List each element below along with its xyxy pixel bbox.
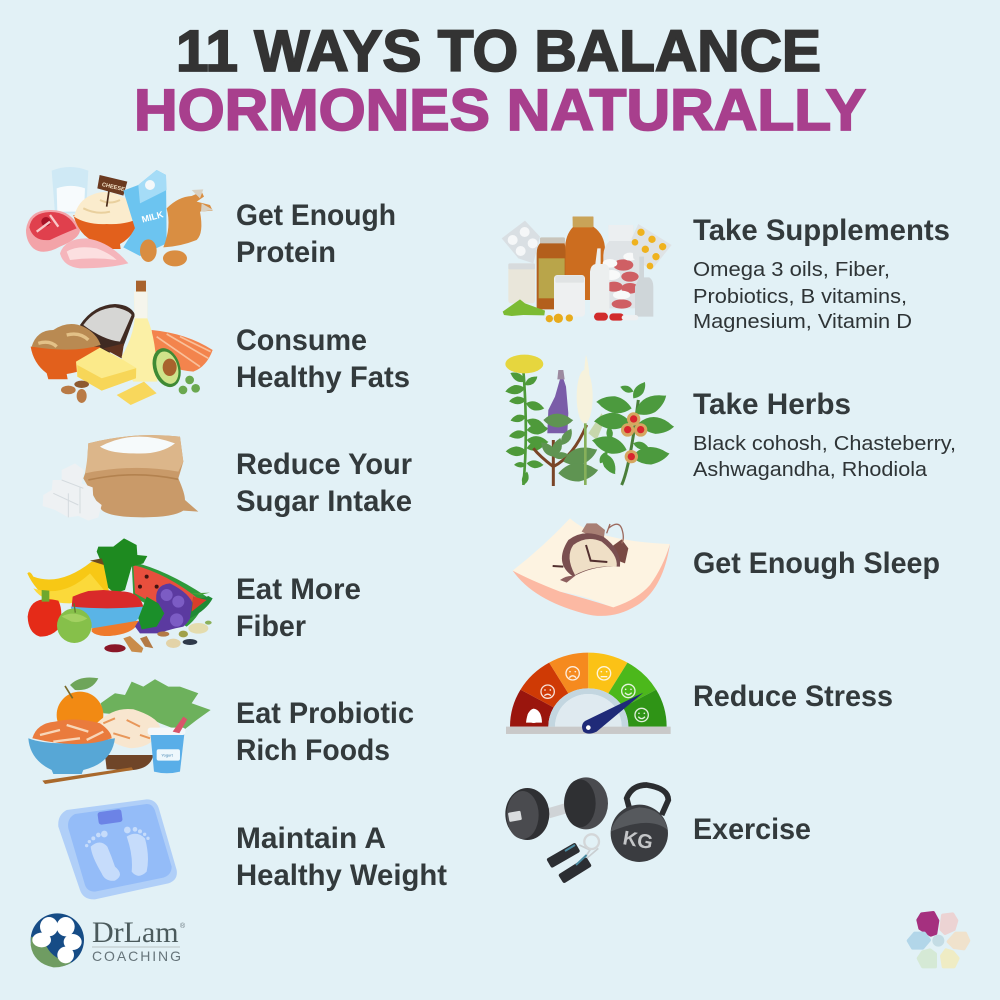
text: Eat Probiotic Rich Foods: Rich Foods	[236, 734, 390, 767]
text: Eat More Fiber	[236, 573, 361, 643]
text: Consume Healthy Fats: Consume	[236, 324, 367, 357]
icon: protein foods: CHEESE	[101, 182, 125, 193]
text: Consume Healthy Fats: Healthy Fats	[236, 361, 410, 394]
logo: DrLam Coaching: DrLam	[92, 916, 179, 949]
icon: probiotic foods	[28, 677, 211, 784]
text: Reduce Your Sugar Intake: Reduce Your	[236, 448, 412, 481]
text: Take Supplements: Magnesium, Vitamin D	[693, 310, 912, 333]
icon: healthy fats	[31, 281, 213, 405]
icon: herbs	[504, 355, 675, 486]
text: Reduce Your Sugar Intake	[236, 448, 412, 518]
text: Maintain A Healthy Weight	[236, 822, 447, 892]
icon: sugar sack	[43, 435, 198, 521]
text: Maintain A Healthy Weight: Maintain A	[236, 822, 386, 855]
icon: probiotic foods: Yogurt	[161, 753, 174, 758]
logo: DrLam Coaching	[31, 913, 186, 967]
text: Get Enough Protein: Protein	[236, 236, 336, 269]
title	[134, 19, 866, 143]
logo: DrLam Coaching: COACHING	[92, 948, 181, 964]
icon: alarm clock on pillow	[513, 518, 670, 616]
icon: protein foods: MILK	[141, 209, 165, 225]
text: Take Supplements: Probiotics, B vitamins,	[693, 285, 907, 308]
logo: DrLam Coaching: ®	[180, 922, 186, 930]
text: Take Herbs	[693, 388, 956, 481]
text: Eat Probiotic Rich Foods	[236, 697, 414, 767]
icon: decorative flower logo	[908, 913, 969, 967]
text: Reduce Your Sugar Intake: Sugar Intake	[236, 485, 412, 518]
text: Take Supplements	[693, 214, 950, 333]
text: Take Herbs: Black cohosh, Chasteberry,	[693, 432, 956, 455]
text: Eat Probiotic Rich Foods: Eat Probiotic	[236, 697, 414, 730]
title: 11 WAYS TO BALANCE	[176, 19, 821, 84]
icon: fiber foods	[27, 538, 213, 653]
icon: weight scale	[58, 799, 177, 899]
text: Consume Healthy Fats	[236, 324, 410, 394]
text: Take Herbs: Ashwagandha, Rhodiola	[693, 458, 928, 481]
text: Get Enough Protein: Get Enough	[236, 199, 396, 232]
text: Take Supplements: Omega 3 oils, Fiber,	[693, 258, 890, 281]
text: Reduce Stress: Reduce Stress	[693, 680, 893, 713]
text: Get Enough Sleep: Get Enough Sleep	[693, 547, 940, 580]
text: Take Herbs: Take Herbs	[693, 388, 851, 421]
title: HORMONES NATURALLY	[134, 78, 866, 143]
icon: dumbbell kettlebell gripper: KG	[621, 827, 654, 854]
icon: stress gauge	[506, 653, 671, 734]
text: Take Supplements: Take Supplements	[693, 214, 950, 247]
text: Exercise: Exercise	[693, 813, 811, 846]
text: Get Enough Protein	[236, 199, 396, 269]
icon: supplements	[502, 217, 672, 323]
text: Eat More Fiber: Eat More	[236, 573, 361, 606]
icon: protein foods	[26, 167, 213, 268]
text: Maintain A Healthy Weight: Healthy Weight	[236, 859, 447, 892]
icon: dumbbell kettlebell gripper	[505, 777, 668, 884]
text: Eat More Fiber: Fiber	[236, 610, 306, 643]
